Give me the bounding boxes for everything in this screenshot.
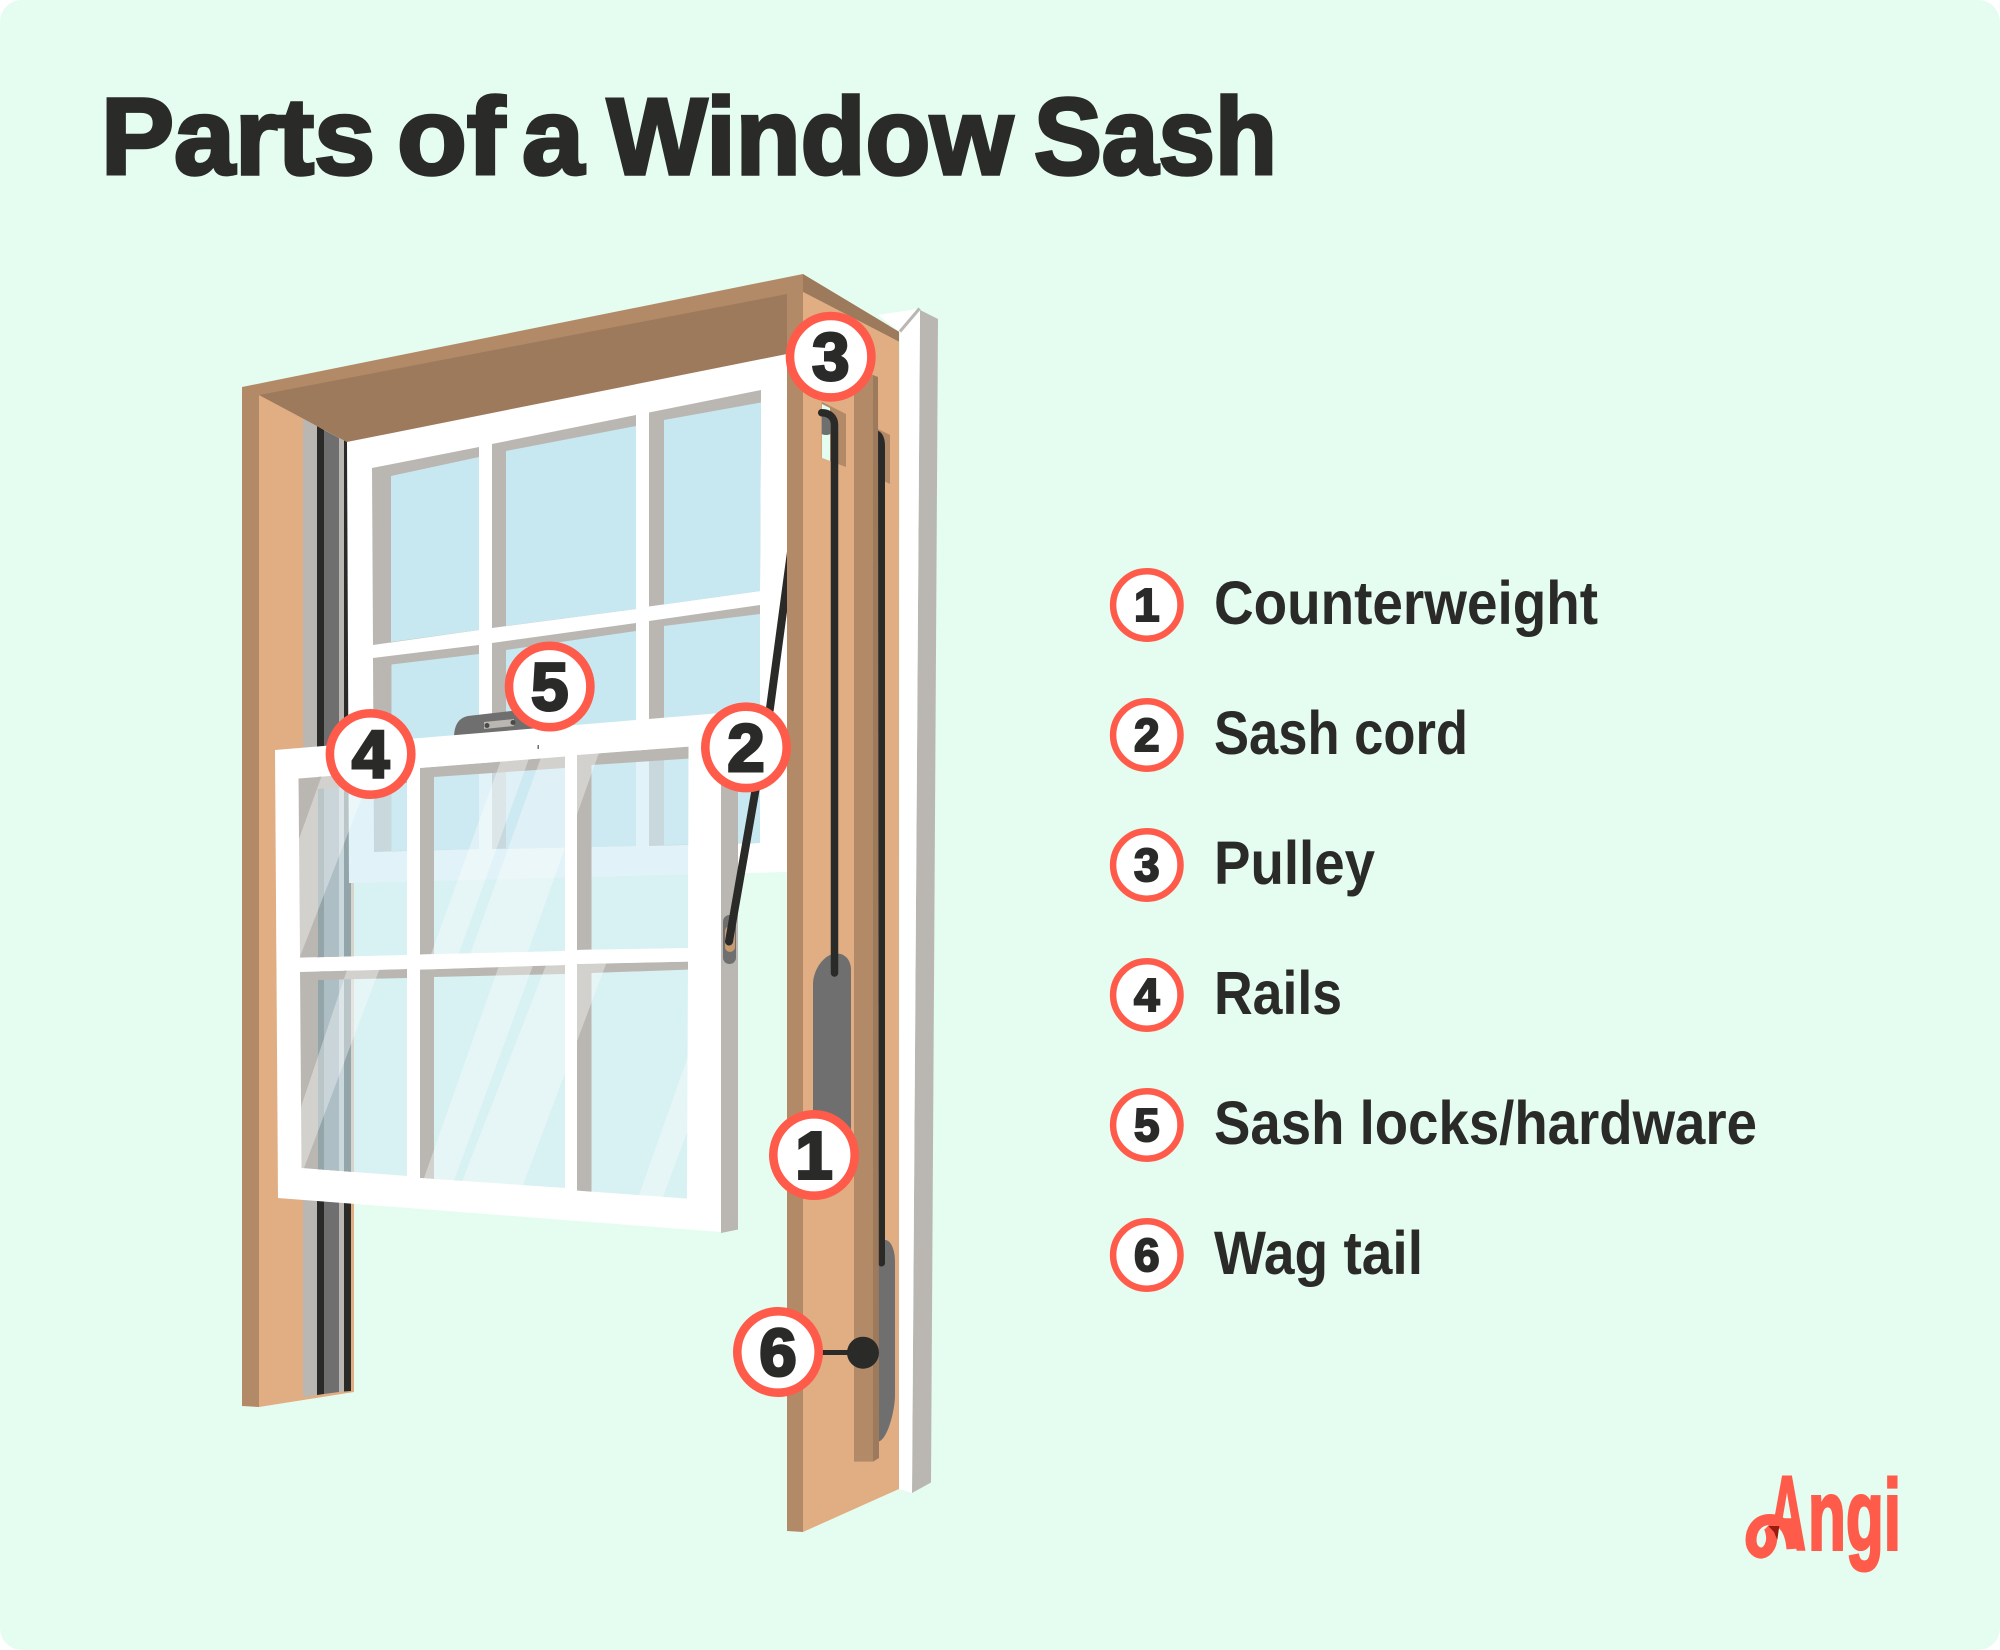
upper sash panes [372, 390, 761, 852]
glass tint [298, 747, 688, 1199]
legend item: pulley: 3 [1134, 839, 1160, 891]
legend item: wag tail [1113, 1219, 1423, 1289]
pane reveals [298, 747, 688, 1192]
title: Parts [101, 76, 375, 198]
legend [1113, 569, 1757, 1289]
second cord pocket [878, 429, 890, 484]
wag tail weight [878, 1240, 895, 1442]
callout 2: 2 [727, 711, 765, 786]
left jamb [242, 387, 354, 1407]
Angi logo [1751, 1454, 1901, 1572]
legend item: rails: 4 [1134, 969, 1160, 1021]
callout 3: 3 [812, 320, 849, 395]
parting strip [854, 366, 879, 1462]
callout 6 [737, 1311, 819, 1393]
title: of [397, 76, 506, 198]
legend item: rails: Rails [1214, 959, 1342, 1027]
legend item: counterweight: Counterweight [1214, 569, 1598, 637]
second sash cord [874, 434, 882, 1263]
sash frame [275, 713, 721, 1232]
pulley pocket [822, 402, 846, 467]
title [101, 76, 1277, 198]
sash cord to lower sash [729, 552, 791, 942]
legend item: wag tail: 6 [1134, 1229, 1160, 1281]
legend item: pulley [1113, 829, 1375, 899]
title: a [522, 76, 585, 198]
legend item: sash locks/hardware: Sash locks/hardware [1214, 1089, 1757, 1157]
legend item: pulley: Pulley [1214, 829, 1375, 897]
Angi logo: A [1768, 1454, 1806, 1572]
upper sash [347, 354, 787, 883]
legend item: rails [1113, 959, 1342, 1029]
callout 2 [705, 707, 787, 788]
sash cord over pulley [822, 413, 834, 973]
legend item: sash cord: Sash cord [1214, 699, 1468, 767]
cord slot on sash side [723, 915, 736, 964]
sash side [721, 711, 738, 1233]
lower sash [255, 552, 791, 1233]
legend item: sash cord: 2 [1134, 709, 1160, 761]
callout 5 [509, 646, 590, 727]
title: Window [607, 76, 1013, 198]
legend item: wag tail: Wag tail [1214, 1219, 1423, 1287]
Angi logo: ngi [1808, 1459, 1901, 1571]
callout 3 [790, 316, 871, 397]
sash lock hardware [454, 710, 540, 738]
glass reflections [276, 754, 688, 1199]
window head [242, 274, 803, 442]
leader line and dot for wag tail [815, 1337, 879, 1369]
counterweight [813, 954, 851, 1160]
legend item: sash cord [1113, 699, 1468, 769]
outer casing, right [878, 308, 938, 1493]
callout 4: 4 [352, 718, 389, 792]
callout 1 [773, 1114, 855, 1196]
callout 5: 5 [531, 650, 568, 725]
callout 1: 1 [795, 1118, 833, 1194]
title: Sash [1034, 76, 1277, 198]
callout 6: 6 [759, 1316, 797, 1390]
legend item: counterweight: 1 [1134, 579, 1160, 631]
legend item: sash locks/hardware: 5 [1134, 1099, 1160, 1151]
callout 4 [330, 713, 411, 795]
right jamb [787, 274, 899, 1532]
window illustration [242, 274, 938, 1532]
